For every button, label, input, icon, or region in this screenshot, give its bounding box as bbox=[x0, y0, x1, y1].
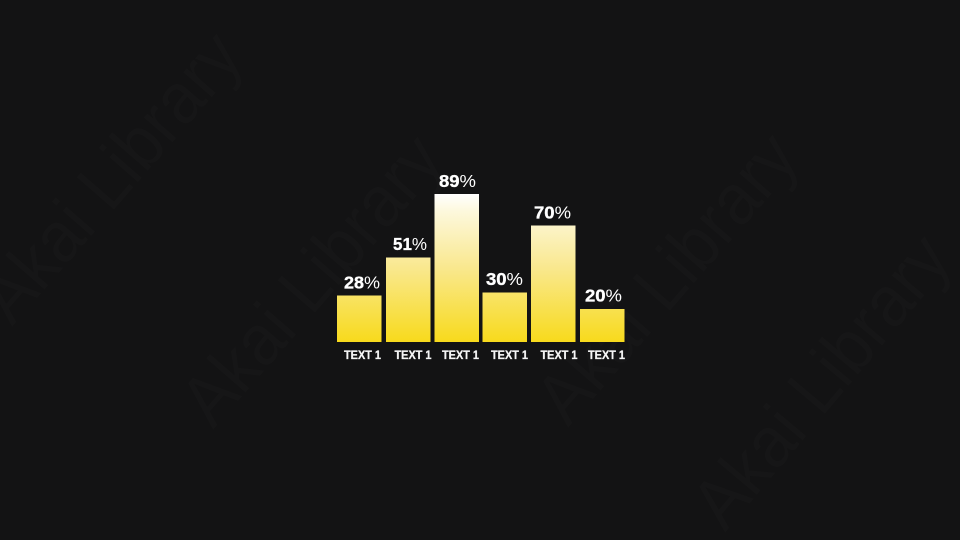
bar chart bbox=[337, 171, 625, 362]
category labels: TEXT 1 bbox=[540, 348, 578, 362]
category labels: TEXT 1 bbox=[344, 348, 381, 362]
category labels: TEXT 1 bbox=[491, 348, 528, 362]
category labels: TEXT 1 bbox=[442, 348, 479, 362]
value labels: 70% bbox=[534, 202, 571, 222]
value labels: 89% bbox=[439, 171, 476, 191]
value labels: 30% bbox=[486, 269, 523, 289]
category labels: TEXT 1 bbox=[588, 348, 625, 362]
category labels: TEXT 1 bbox=[394, 348, 432, 362]
value labels: 28% bbox=[344, 272, 380, 292]
value labels bbox=[344, 171, 622, 306]
watermarks: Akai Library bbox=[520, 117, 814, 438]
bars bbox=[337, 194, 624, 342]
value labels: 51% bbox=[393, 234, 427, 254]
watermarks: Akai Library bbox=[165, 119, 459, 440]
value labels: 20% bbox=[585, 286, 622, 306]
category labels bbox=[344, 348, 625, 362]
